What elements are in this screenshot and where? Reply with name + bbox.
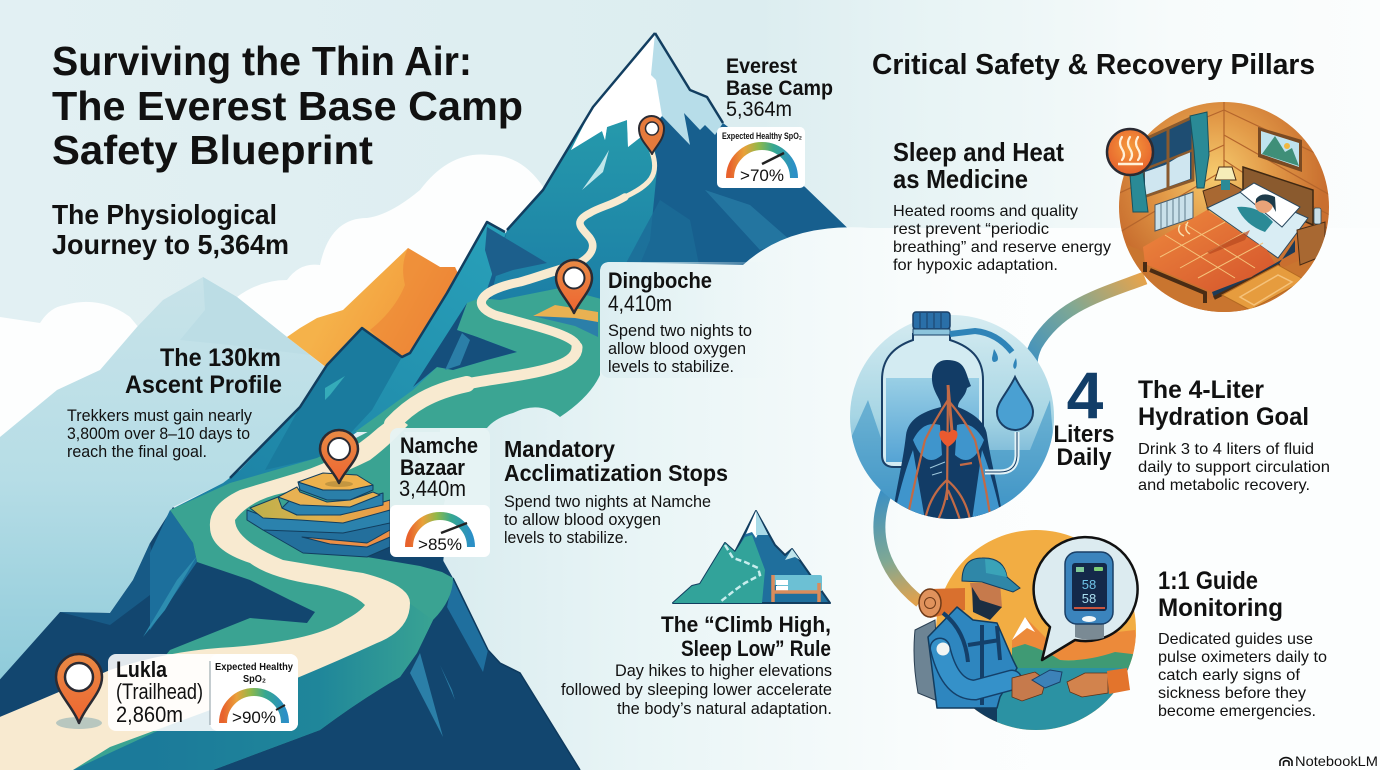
bed frame: [1145, 262, 1280, 303]
water bottle: [882, 312, 1012, 467]
monitoring text: 1:1 Guide: [1158, 567, 1258, 595]
hydration text: and metabolic recovery.: [1138, 477, 1310, 494]
marker: Lukla: [56, 654, 102, 729]
nightstand and lamp: [1203, 182, 1243, 210]
card: Namche Bazaar: Namche: [400, 433, 478, 458]
monitoring text: [1158, 567, 1327, 720]
title: The Everest Base Camp: [52, 83, 523, 129]
sleep text: Sleep and Heat: [893, 137, 1064, 167]
climb high text: Sleep Low” Rule: [681, 636, 831, 661]
monitoring text: sickness before they: [1158, 685, 1306, 702]
callout: 4 liters daily: [1054, 358, 1114, 471]
hydration text: The 4-Liter: [1138, 376, 1264, 404]
green terrain around the trail: [73, 418, 453, 770]
headboard: [1243, 167, 1313, 225]
ascent profile text: reach the final goal.: [67, 443, 207, 461]
navy shoulder on small peak: [485, 227, 547, 277]
monitoring text: become emergencies.: [1158, 703, 1316, 720]
hydration text: Drink 3 to 4 liters of fluid: [1138, 441, 1314, 458]
hydration text: [1138, 376, 1330, 494]
card: Dingboche: 4,410m: [608, 291, 672, 316]
snow cap: [571, 33, 723, 150]
icon: climb high sleep low: [673, 511, 830, 603]
navy patch below Namche: [367, 545, 445, 572]
sleeping person: [1237, 194, 1276, 232]
window: [1143, 117, 1193, 197]
card: Everest SpO2 gauge: [717, 127, 805, 188]
climb high text: The “Climb High,: [661, 612, 831, 637]
title: Safety Blueprint: [52, 127, 373, 173]
curtains: [1190, 112, 1209, 188]
callout: 4 liters daily: 4: [1067, 358, 1104, 432]
title: Surviving the Thin Air:: [52, 38, 472, 84]
label: Everest Base Camp: 5,364m: [726, 98, 792, 121]
subtitle: Journey to 5,364m: [52, 229, 289, 260]
sleep text: Heated rooms and quality: [893, 203, 1078, 220]
sleep text: [893, 137, 1111, 274]
card: Namche Bazaar: 3,440m: [399, 476, 466, 501]
ascent profile text: Trekkers must gain nearly: [67, 407, 253, 425]
right nightstand: [1297, 222, 1325, 265]
speech bubble with oximeter: 58: [1082, 591, 1096, 606]
acclimatization text: Acclimatization Stops: [504, 460, 728, 486]
arrow: sleep to hydration: [1031, 278, 1145, 380]
card: Everest SpO2 gauge: Expected Healthy SpO₂: [722, 131, 802, 142]
sleep text: for hypoxic adaptation.: [893, 257, 1058, 274]
sleep text: as Medicine: [893, 164, 1028, 194]
label: Everest Base Camp: [726, 55, 833, 121]
monitoring text: Dedicated guides use: [1158, 631, 1313, 648]
card: Everest SpO2 gauge: >70%: [740, 166, 784, 185]
orange mountain: [287, 248, 470, 370]
Dingboche platform: [533, 305, 598, 337]
trail: [0, 152, 655, 770]
climb high text: followed by sleeping lower accelerate: [561, 681, 832, 699]
card: Namche Bazaar: Bazaar: [400, 455, 465, 480]
climb high text: [561, 612, 832, 718]
illustration: hydration: [850, 312, 1060, 520]
lower navy mountain: [0, 507, 580, 770]
bed underside: [1212, 240, 1295, 298]
gauge: Lukla: [223, 692, 285, 727]
small drops: [992, 349, 1017, 369]
sleep text: breathing” and reserve energy: [893, 239, 1111, 256]
card: Lukla: [108, 654, 298, 731]
subtitle: The Physiological: [52, 199, 277, 230]
mid range: [170, 222, 605, 510]
blanket: [1143, 210, 1277, 292]
gauge: Namche: >85%: [418, 535, 462, 554]
callout: 4 liters daily: Liters: [1054, 421, 1114, 448]
monitoring text: catch early signs of: [1158, 667, 1301, 684]
illustration: guide monitoring: [914, 525, 1142, 740]
subtitle: [52, 199, 289, 260]
card: Dingboche: levels to stabilize.: [608, 358, 734, 376]
acclimatization text: [504, 436, 728, 547]
ascent profile text: Ascent Profile: [125, 371, 282, 399]
human silhouette with circulatory system: [893, 360, 1002, 520]
marker: Namche Bazaar: [320, 430, 358, 487]
label: Everest Base Camp: Everest: [726, 55, 797, 78]
hydration text: Hydration Goal: [1138, 403, 1309, 431]
acclimatization text: levels to stabilize.: [504, 529, 628, 547]
card: Lukla: (Trailhead): [116, 679, 203, 704]
teal band under the trail: [73, 600, 433, 770]
right cloud: [237, 154, 565, 360]
title: [52, 38, 523, 173]
marker: Dingboche: [556, 260, 592, 313]
radiator: [1155, 192, 1193, 231]
hiker: [914, 558, 1130, 708]
acclimatization text: Mandatory: [504, 436, 615, 462]
label: Everest Base Camp: Base Camp: [726, 77, 833, 100]
acclimatization text: Spend two nights at Namche: [504, 493, 711, 511]
rug: [1222, 265, 1305, 310]
hydration text: daily to support circulation: [1138, 459, 1330, 476]
card: Dingboche: Spend two nights to: [608, 322, 752, 340]
card: Lukla: SpO₂: [243, 673, 266, 685]
floor: [1126, 244, 1322, 312]
icon: heat badge: [1107, 129, 1153, 175]
sheets and pillow: [1207, 190, 1308, 258]
gauge: Lukla: >90%: [232, 708, 276, 727]
card: Lukla: Expected Healthy: [215, 661, 293, 673]
speech bubble with oximeter: [1034, 537, 1138, 660]
bed icon: [772, 575, 822, 602]
card: Namche Bazaar: [390, 428, 490, 557]
card: Dingboche: [600, 262, 790, 378]
logo: NotebookLM: NotebookLM: [1295, 753, 1378, 769]
left cloud: [0, 302, 145, 450]
climb high text: Day hikes to higher elevations: [615, 662, 832, 680]
acclimatization text: to allow blood oxygen: [504, 511, 661, 529]
pale distant mountain: [0, 277, 325, 680]
heading: pillars: Critical Safety & Recovery Pillars: [872, 49, 1315, 81]
speech bubble with oximeter: 58: [1082, 577, 1096, 592]
callout: 4 liters daily: Daily: [1056, 444, 1112, 471]
Namche terraces: [247, 473, 390, 557]
ascent profile text: 3,800m over 8–10 days to: [67, 425, 250, 443]
card: Lukla: Lukla: [116, 657, 168, 682]
foreground cloud: [440, 227, 1380, 770]
picture: [1258, 127, 1302, 172]
card: Lukla: 2,860m: [116, 702, 183, 727]
sleep text: rest prevent “periodic: [893, 221, 1049, 238]
climb high text: the body’s natural adaptation.: [617, 700, 832, 718]
illustration: heated bedroom: [1115, 100, 1335, 320]
marker: Everest Base Camp: [639, 116, 664, 154]
card: Dingboche: Dingboche: [608, 268, 712, 293]
arrow: hydration to monitoring: [879, 488, 920, 602]
card: Dingboche: allow blood oxygen: [608, 340, 746, 358]
navy rock shadow: [413, 303, 517, 387]
icon: water drop: [997, 377, 1033, 430]
upper green slopes: [355, 288, 605, 432]
tube: [985, 432, 1017, 472]
ascent profile text: [67, 344, 282, 461]
ascent profile text: The 130km: [160, 344, 281, 372]
monitoring text: Monitoring: [1158, 594, 1283, 622]
main peak: [470, 33, 860, 340]
monitoring text: pulse oximeters daily to: [1158, 649, 1327, 666]
